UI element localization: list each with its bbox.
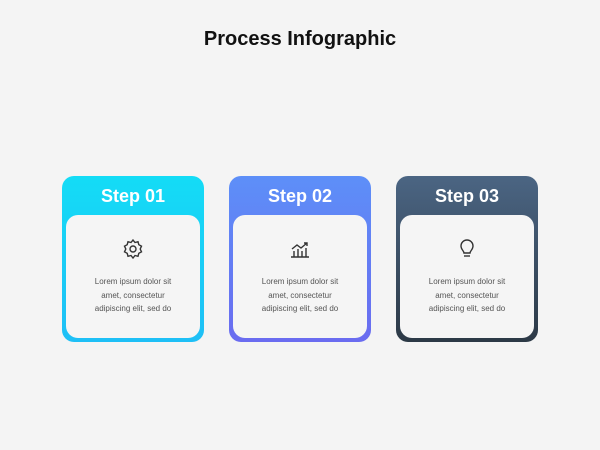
text block 3	[429, 277, 506, 313]
panel: step 01	[62, 176, 204, 342]
panel: step 02	[229, 176, 371, 342]
heading: step 02: Step 02	[268, 186, 332, 206]
icon: bulb	[460, 239, 474, 257]
text block 2: adipiscing elit, sed do	[262, 304, 338, 313]
heading: step 01: Step 01	[101, 186, 165, 206]
text block 3: amet, consectetur	[435, 290, 499, 300]
text block 1: Lorem ipsum dolor sit	[95, 277, 171, 286]
text block 1: amet, consectetur	[101, 290, 165, 300]
inner box 1	[66, 215, 200, 338]
icon: gear	[124, 239, 142, 259]
text block 1: adipiscing elit, sed do	[95, 304, 171, 313]
text block 3: adipiscing elit, sed do	[429, 304, 505, 313]
inner box 2	[233, 215, 367, 338]
text block 1	[95, 277, 172, 313]
text block 3: Lorem ipsum dolor sit	[429, 277, 505, 286]
text block 2: Lorem ipsum dolor sit	[262, 277, 338, 286]
heading: step 03: Step 03	[435, 186, 499, 206]
text block 2	[262, 277, 338, 313]
text block 2: amet, consectetur	[268, 290, 332, 300]
title: Process Infographic	[204, 28, 396, 50]
panel: step 03	[396, 176, 538, 342]
icon: chart	[291, 242, 309, 258]
inner box 3	[400, 215, 534, 338]
